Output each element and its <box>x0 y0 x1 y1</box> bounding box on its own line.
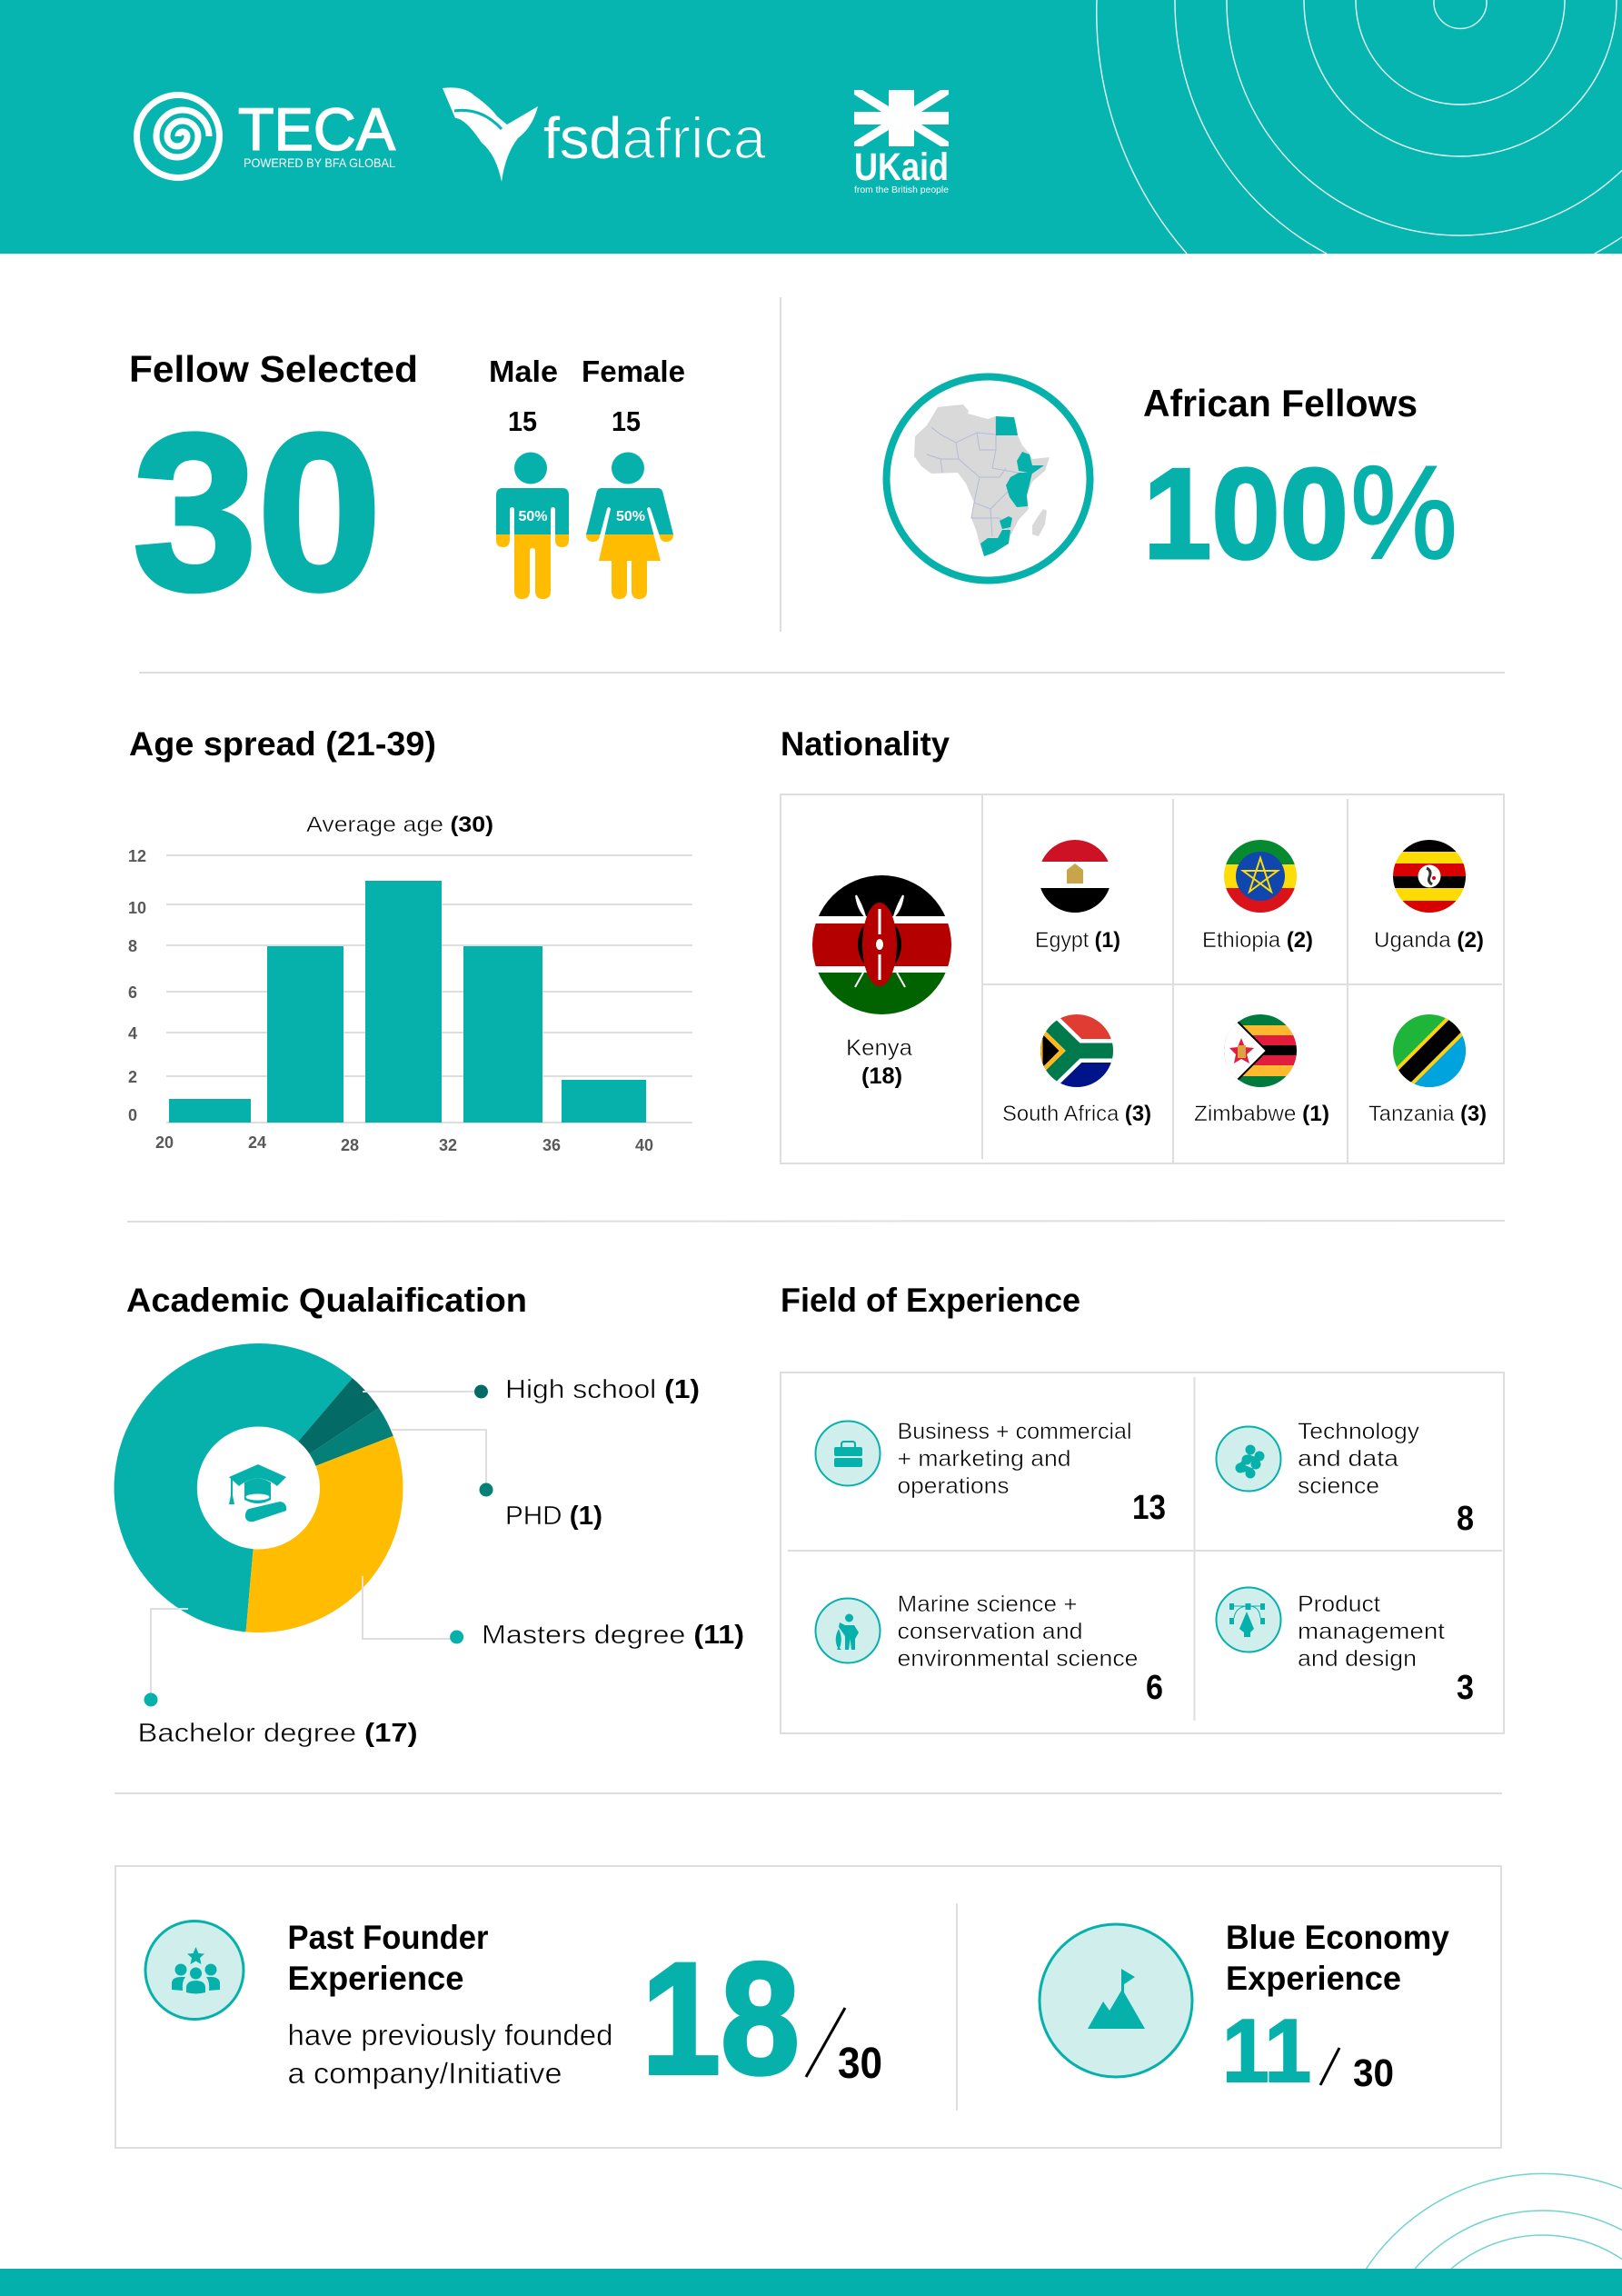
text: marine <box>898 1592 1138 1672</box>
label: Egypt: Egypt (1) <box>1035 928 1120 953</box>
logo: fsdafrica <box>443 87 766 182</box>
icon: female figure: 50% <box>616 509 645 524</box>
flag: Ethiopia <box>1224 840 1297 913</box>
logo: fsdafrica: fsdafrica <box>543 105 766 171</box>
bar chart: age spread: 4 <box>128 1024 137 1043</box>
logo: UK aid: UKaid <box>854 145 949 189</box>
icon: male figure <box>496 453 569 599</box>
flag: Zimbabwe <box>1224 1014 1297 1087</box>
heading: fellow selected: Fellow Selected <box>129 348 418 390</box>
label: Zimbabwe: Zimbabwe (1) <box>1194 1102 1329 1126</box>
icon: technology blobs <box>1216 1427 1281 1491</box>
icon: people with star <box>145 1922 244 2020</box>
text: business: + marketing and <box>898 1446 1070 1472</box>
label: Ethiopia: Ethiopia (2) <box>1202 928 1313 953</box>
donut chart: academic qualification <box>114 1343 403 1632</box>
number: 100 percent: 100 <box>1143 442 1348 586</box>
heading: blue economy experience <box>1226 1919 1449 1997</box>
heading: field of experience: Field of Experience <box>781 1282 1080 1319</box>
text: technology <box>1298 1419 1420 1499</box>
number: technology: 8 <box>1457 1500 1474 1538</box>
icon: briefcase <box>816 1422 880 1485</box>
logo: UK aid <box>854 90 949 195</box>
flag: South Africa <box>1040 1014 1113 1087</box>
text: marine: conservation and <box>898 1619 1083 1644</box>
leader: masters <box>363 1576 463 1643</box>
number: 30 fellows: 30 <box>133 387 382 636</box>
segment: masters <box>246 1436 403 1632</box>
number: 11 of 30 <box>1222 2001 1394 2101</box>
label: Tanzania: Tanzania (3) <box>1368 1102 1487 1126</box>
panel: african fellows <box>887 376 1458 586</box>
icon: fisherman <box>816 1598 880 1663</box>
text: technology: science <box>1298 1473 1379 1499</box>
text: product: Product <box>1298 1592 1380 1617</box>
text: marine: Marine science + <box>898 1592 1078 1617</box>
label: high school: High school (1) <box>505 1375 700 1404</box>
heading: blue economy experience: Experience <box>1226 1960 1401 1997</box>
label: female: Female <box>582 354 685 388</box>
label: Kenya: (18) <box>861 1063 902 1089</box>
logo: TECA: POWERED BY BFA GLOBAL <box>244 155 395 170</box>
label: Uganda: Uganda (2) <box>1374 928 1484 953</box>
text: business <box>898 1419 1132 1499</box>
bar chart: age spread: 6 <box>128 983 137 1002</box>
number: 11 of 30: 30 <box>1353 2051 1394 2095</box>
header band <box>0 0 1622 254</box>
number: male count: 15 <box>508 405 537 437</box>
segment: bachelor <box>114 1343 353 1632</box>
panel: field of experience <box>781 1373 1504 1733</box>
leader: bachelor <box>144 1609 188 1707</box>
bar chart: age spread: 2 <box>128 1068 137 1086</box>
text: technology: Technology <box>1298 1419 1420 1444</box>
flag: Kenya <box>809 873 954 1018</box>
icon: africa map in circle <box>887 376 1090 580</box>
logo: UK aid: from the British people <box>854 185 949 195</box>
text: previously founded: have previously founded <box>287 2019 612 2051</box>
leader: PHD <box>392 1430 493 1496</box>
bar chart: age spread: 8 <box>128 937 137 955</box>
bar chart: age spread: 20 <box>155 1133 174 1152</box>
number: business: 13 <box>1132 1489 1166 1527</box>
bar chart: age spread: 10 <box>128 899 146 917</box>
heading: past founder experience <box>287 1919 489 1997</box>
chart title: Average age (30) <box>306 813 493 837</box>
number: product: 3 <box>1457 1669 1474 1707</box>
text: product: and design <box>1298 1646 1417 1672</box>
number: 11 of 30: 11 <box>1222 2001 1311 2101</box>
label: Kenya <box>846 1035 912 1089</box>
bar chart: age spread: 28 <box>341 1136 359 1154</box>
bar chart: age spread: 12 <box>128 847 146 865</box>
heading: age spread: Age spread (21-39) <box>129 725 436 763</box>
leader: high school <box>363 1385 488 1398</box>
heading: past founder experience: Past Founder <box>287 1919 489 1956</box>
text: product: management <box>1298 1619 1445 1644</box>
heading: academic qualification: Academic Qualaification <box>126 1282 527 1319</box>
flag: Egypt <box>1040 840 1110 913</box>
bar chart: age spread: 36 <box>542 1136 561 1154</box>
heading: african fellows: African Fellows <box>1143 382 1418 424</box>
segment: high school <box>298 1378 379 1454</box>
logo: TECA <box>136 95 395 178</box>
number: female count: 15 <box>612 405 641 437</box>
number: 18 of 30: 30 <box>838 2040 882 2088</box>
panel: founder and blue economy <box>115 1866 1501 2148</box>
decorative arcs and footer band <box>0 2173 1622 2296</box>
number: 100 percent <box>1143 438 1458 586</box>
number: 18 of 30: 18 <box>642 1931 800 2108</box>
segment: PHD <box>310 1408 393 1466</box>
text: product <box>1298 1592 1445 1672</box>
panel: nationality table <box>781 794 1504 1163</box>
label: PHD: PHD (1) <box>505 1502 602 1531</box>
label: male: Male <box>489 354 558 388</box>
panel: fellows selected <box>131 354 684 599</box>
icon: male figure: 50% <box>518 509 548 524</box>
heading: blue economy experience: Blue Economy <box>1226 1919 1449 1956</box>
bar chart: age spread: 32 <box>439 1136 457 1154</box>
text: technology: and data <box>1298 1446 1398 1472</box>
text: previously founded: a company/Initiative <box>287 2057 562 2090</box>
number: 100 percent: % <box>1350 438 1458 586</box>
icon: pen tool <box>1216 1587 1281 1652</box>
heading: past founder experience: Experience <box>287 1960 463 1997</box>
text: business: operations <box>898 1473 1009 1499</box>
label: South Africa: South Africa (3) <box>1002 1102 1151 1126</box>
text: previously founded <box>287 2019 612 2090</box>
bar chart: age spread: 40 <box>635 1136 653 1154</box>
bar chart: age spread <box>128 813 692 1154</box>
bar chart: age spread: 0 <box>128 1106 137 1124</box>
icon: mountain with flag <box>1040 1924 1192 2077</box>
flag: Tanzania <box>1393 1014 1466 1087</box>
icon: female figure <box>586 453 673 599</box>
logo: TECA: TECA <box>238 95 395 163</box>
icon: graduation cap and scroll <box>229 1464 286 1522</box>
text: marine: environmental science <box>898 1646 1138 1672</box>
bar chart: age spread: 24 <box>248 1133 266 1152</box>
heading: nationality: Nationality <box>781 725 950 763</box>
label: Kenya: Kenya <box>846 1035 912 1061</box>
text: business: Business + commercial <box>898 1419 1132 1444</box>
number: marine: 6 <box>1146 1669 1163 1707</box>
label: bachelor: Bachelor degree (17) <box>138 1719 418 1748</box>
label: masters: Masters degree (11) <box>482 1621 744 1650</box>
flag: Uganda <box>1393 840 1466 913</box>
